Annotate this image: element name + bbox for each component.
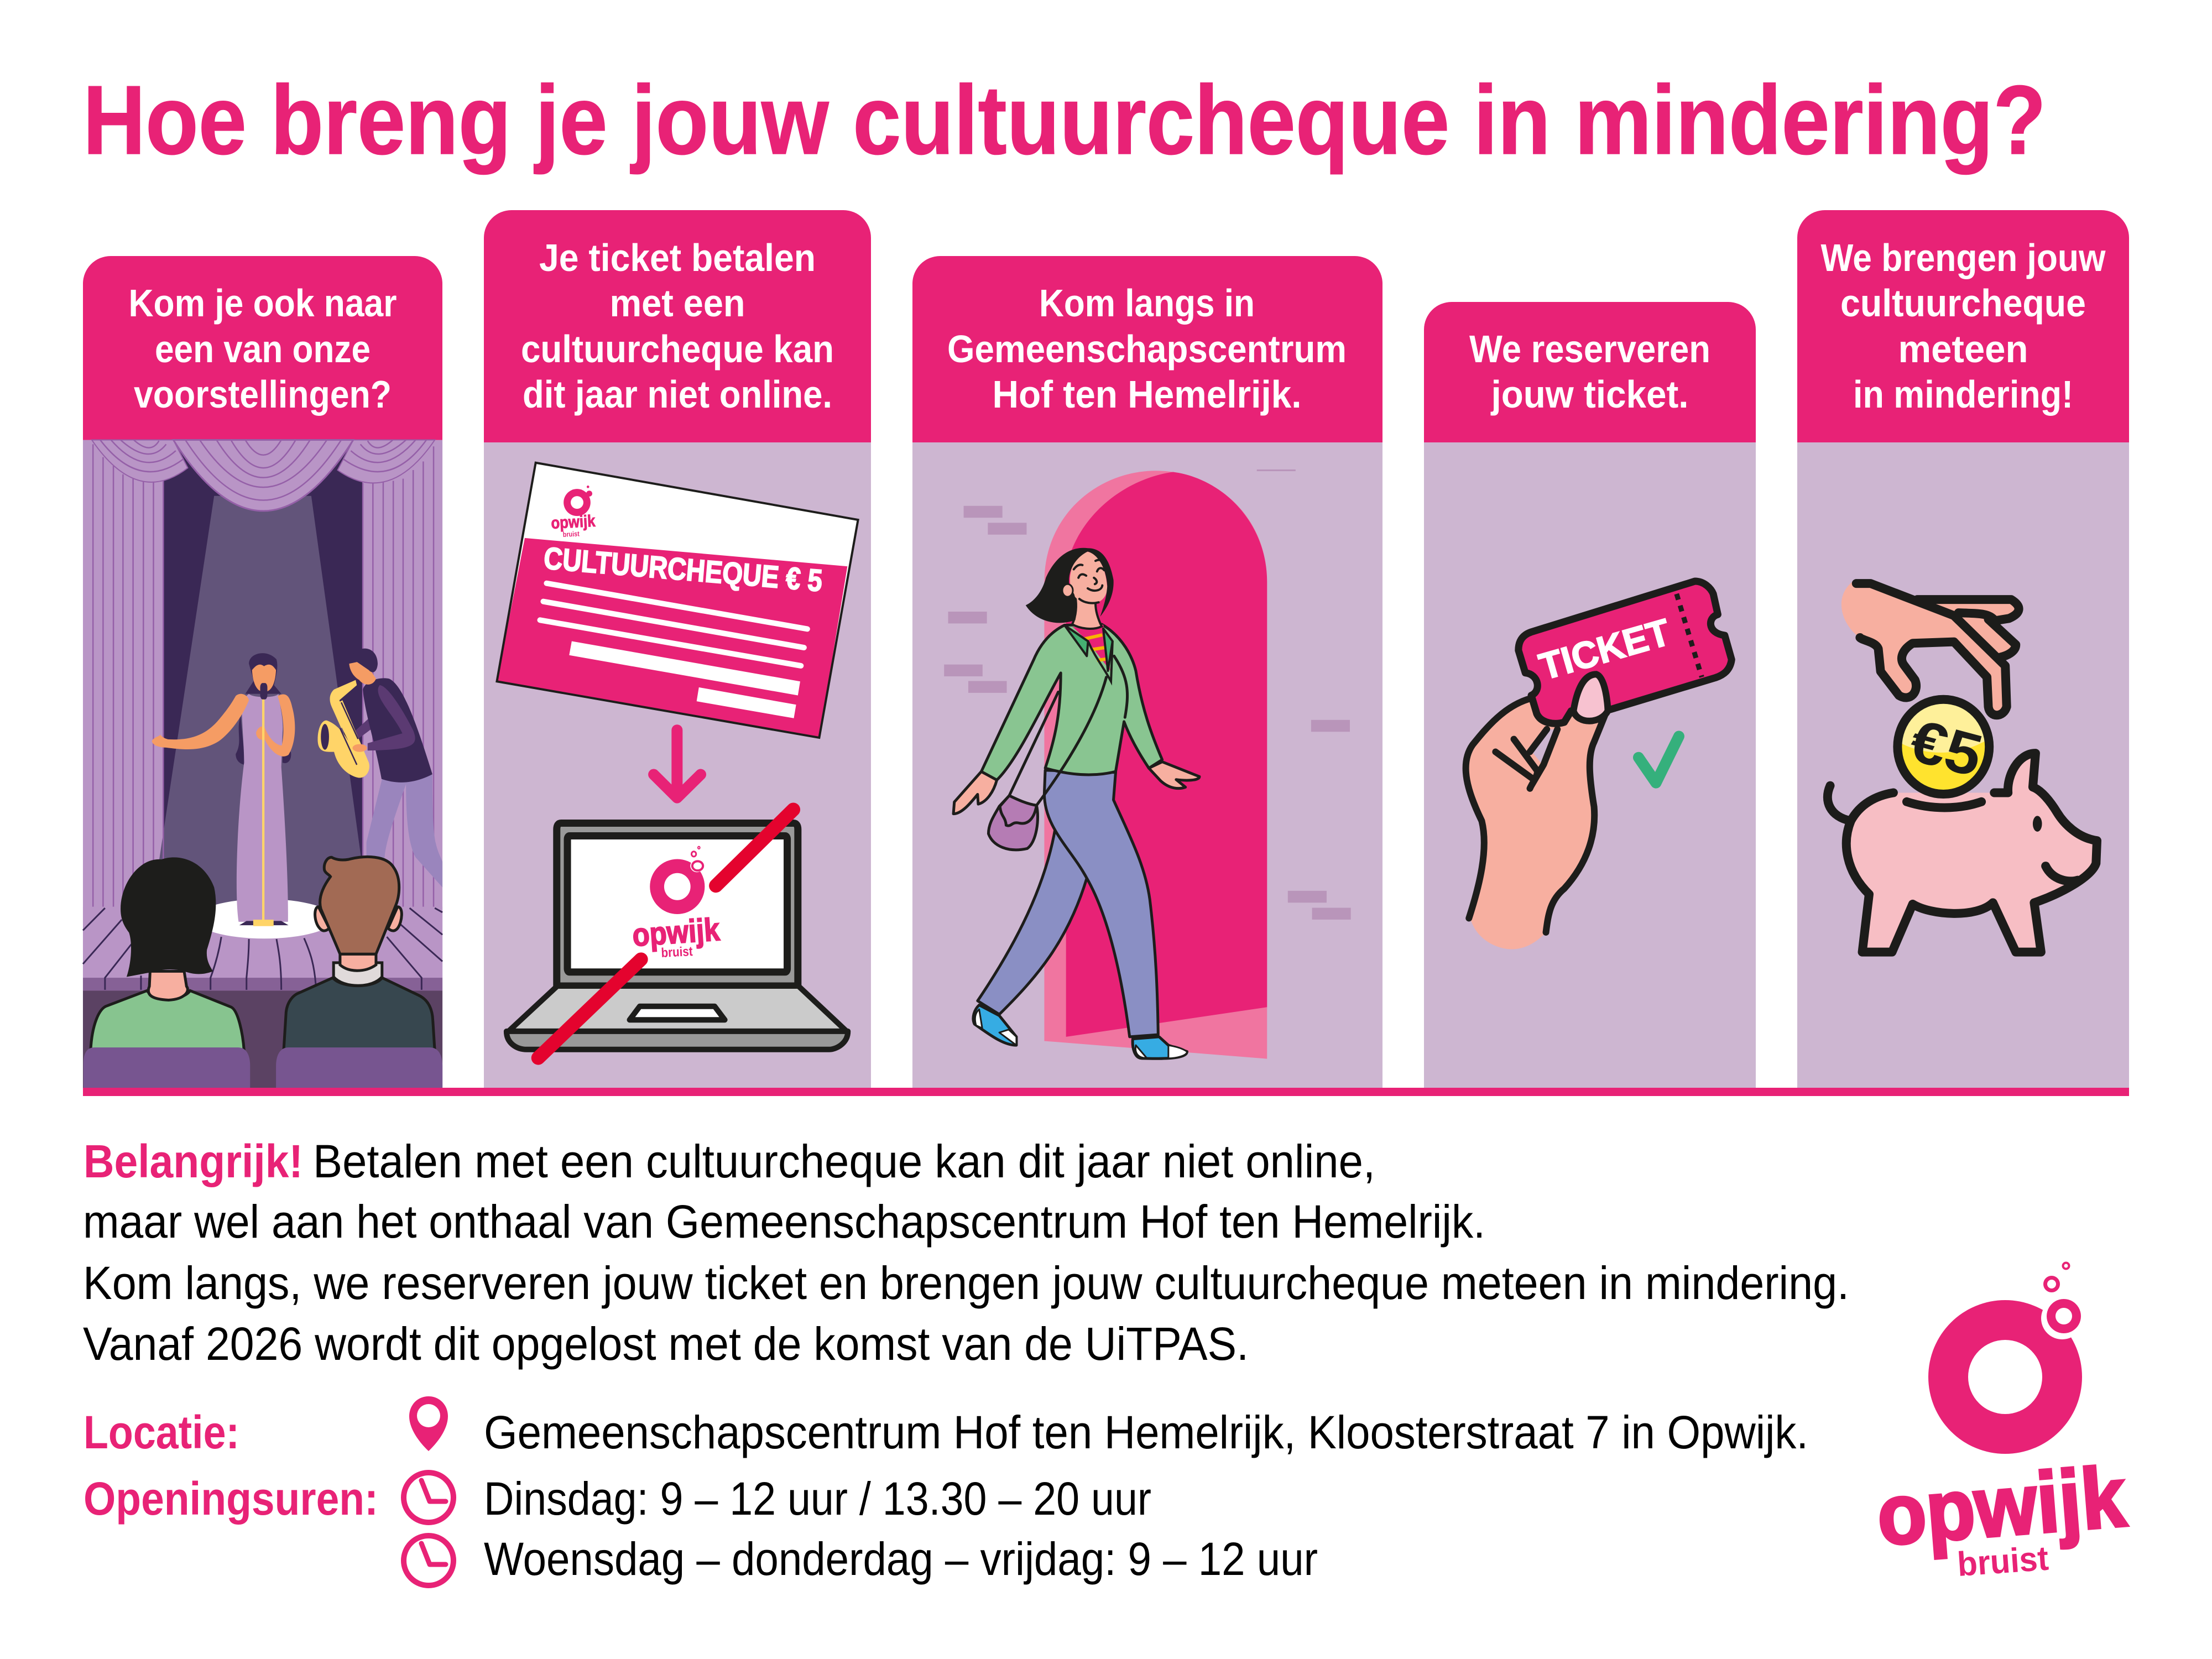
illustration: hand holding ticket — [1466, 581, 1731, 950]
illustration: cultuurcheque card — [497, 463, 858, 738]
illustration: crossed out laptop: opwijk — [631, 911, 721, 953]
illustration: crossed out laptop: bruist — [661, 944, 693, 961]
heading: panel 3: Gemeenschapscentrum — [947, 327, 1347, 371]
heading: panel 5: meteen — [1898, 327, 2028, 371]
piggy bank — [1828, 753, 2097, 952]
heading: panel 5: We brengen jouw — [1820, 236, 2106, 279]
curtain valance — [92, 440, 435, 511]
illustration: woman walking out of pink door — [944, 469, 1351, 1059]
heading: panel 1: een van onze — [155, 327, 371, 371]
panel: reserveren — [1424, 302, 1756, 1089]
text block: belangrijk: Betalen met een cultuurcheque kan dit jaar niet online, — [313, 1135, 1375, 1187]
seats — [84, 1047, 442, 1089]
heading: panel 5: in mindering! — [1853, 373, 2073, 416]
heading: panel 5 — [1797, 210, 2129, 442]
heading: panel 2 — [484, 210, 871, 442]
coin — [1897, 700, 1989, 794]
audience woman — [91, 857, 244, 1051]
text block: belangrijk: Kom langs, we reserveren jouw ticket en brengen jouw cultuurcheque meteen in mindering. — [83, 1257, 1849, 1309]
illustration: crossed out laptop — [507, 810, 848, 1058]
door — [1044, 471, 1267, 1059]
text block: belangrijk: maar wel aan het onthaal van Gemeenschapscentrum Hof ten Hemelrijk. — [83, 1196, 1485, 1248]
icon: green check mark — [1639, 737, 1679, 783]
location row — [84, 1396, 1808, 1458]
heading: panel 2: Je ticket betalen — [539, 236, 816, 279]
panel: gemeenschapscentrum — [912, 256, 1383, 1089]
saxophonist — [318, 649, 442, 888]
heading: panel 2: dit jaar niet online. — [523, 373, 832, 416]
illustration: hand holding ticket: TICKET — [1535, 611, 1675, 688]
opening hours: Woensdag – donderdag – vrijdag: 9 – 12 uur — [484, 1533, 1318, 1585]
logo: opwijk bruist: bruist — [1956, 1540, 2050, 1584]
text block: belangrijk — [83, 1135, 1849, 1370]
heading: panel 3: Hof ten Hemelrijk. — [992, 373, 1302, 416]
illustration: theatre stage with singer, saxophonist and audience — [83, 440, 442, 1089]
opening hours — [84, 1473, 1318, 1585]
illustration: hand, coin and piggy bank — [1828, 581, 2097, 952]
heading: panel 1 — [83, 256, 442, 442]
icon: clock 2 — [404, 1536, 453, 1585]
illustration: cultuurcheque card: bruist — [562, 529, 580, 539]
woman — [953, 624, 1199, 1058]
bricks — [944, 469, 1351, 920]
heading: panel 2: met een — [609, 281, 745, 325]
heading: panel 2: cultuurcheque kan — [521, 327, 834, 371]
text block: belangrijk: Belangrijk! — [84, 1135, 303, 1187]
illustration: cultuurcheque card: opwijk — [551, 512, 596, 533]
heading: panel 4: jouw ticket. — [1490, 373, 1689, 416]
panel: voorstellingen — [83, 256, 442, 1089]
heading: panel 1: voorstellingen? — [134, 373, 392, 416]
opening hours: Openingsuren: — [84, 1473, 378, 1525]
hand — [1841, 581, 2019, 715]
logo: opwijk bruist: opwijk — [1874, 1448, 2130, 1563]
location row: Locatie: — [84, 1406, 239, 1458]
audience man — [284, 857, 435, 1051]
panel: in mindering — [1797, 210, 2129, 1089]
heading: panel 5: cultuurcheque — [1840, 281, 2086, 325]
heading: panel 1: Kom je ook naar — [128, 281, 397, 325]
opening hours: Dinsdag: 9 – 12 uur / 13.30 – 20 uur — [484, 1473, 1151, 1525]
panel: niet online — [484, 210, 871, 1089]
location row: Gemeenschapscentrum Hof ten Hemelrijk, Kloosterstraat 7 in Opwijk. — [484, 1406, 1808, 1458]
illustration: hand, coin and piggy bank: €5 — [1903, 706, 1989, 789]
icon: location pin — [409, 1396, 448, 1451]
text block: belangrijk: Vanaf 2026 wordt dit opgelost met de komst van de UiTPAS. — [83, 1318, 1249, 1370]
heading: panel 3 — [912, 256, 1383, 442]
illustration: cultuurcheque card: CULTUURCHEQUE € 5 — [542, 540, 823, 598]
singer — [152, 653, 295, 926]
arrow: down from cheque to laptop — [654, 730, 701, 798]
logo: opwijk bruist — [1874, 1263, 2130, 1584]
icon: clock 1 — [404, 1473, 453, 1522]
heading: panel 4: We reserveren — [1469, 327, 1710, 371]
baseline rule — [83, 1088, 2129, 1096]
heading: panel 3: Kom langs in — [1039, 281, 1255, 325]
heading: panel 4 — [1424, 302, 1756, 442]
